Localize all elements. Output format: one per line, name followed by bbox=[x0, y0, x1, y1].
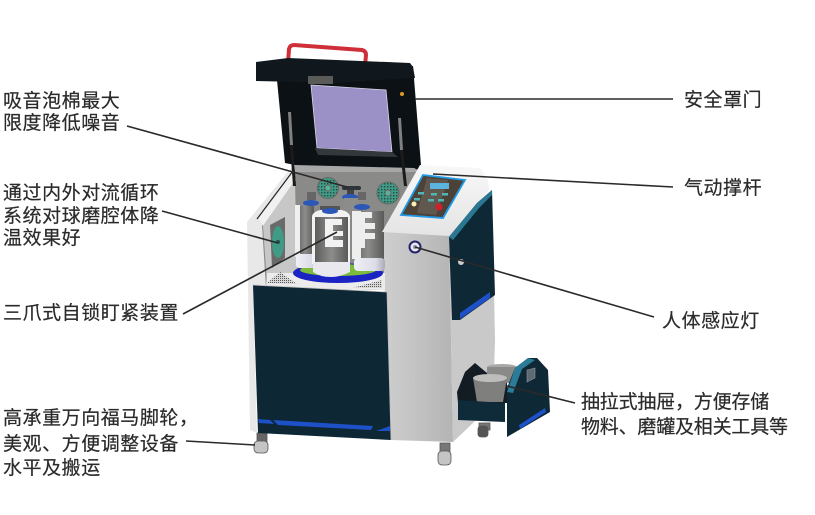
leader lines bbox=[127, 99, 673, 445]
label: drawer: 抽拉式抽屉，方便存储 bbox=[581, 391, 769, 413]
amber indicator bbox=[400, 92, 404, 96]
drawer tray bbox=[458, 400, 505, 422]
caster wheels bbox=[254, 423, 490, 465]
right jar bbox=[352, 211, 385, 271]
chamber floor with vent grilles bbox=[266, 272, 385, 290]
left wall bbox=[263, 180, 297, 283]
left jar bbox=[295, 205, 318, 268]
grey column side bbox=[449, 190, 495, 442]
left cabinet side and frame bbox=[247, 168, 300, 433]
interior chamber bbox=[257, 165, 418, 290]
lid with handle and window bbox=[256, 45, 421, 186]
machine illustration bbox=[247, 45, 550, 465]
red handle bbox=[288, 45, 366, 66]
label: cooling circulation: 温效果好 bbox=[3, 227, 81, 249]
label: casters: 水平及搬运 bbox=[3, 457, 101, 479]
gas struts bbox=[288, 112, 293, 145]
viewing window bbox=[311, 85, 392, 152]
lid hinge badge bbox=[308, 76, 333, 84]
lower front door bbox=[253, 285, 391, 440]
sloped console top bbox=[382, 165, 489, 236]
back caps and T-handle bbox=[303, 186, 370, 212]
label: clamping device: 三爪式自锁盯紧装置 bbox=[3, 302, 179, 324]
label: casters bbox=[3, 407, 199, 479]
rear cup bbox=[487, 364, 517, 383]
lid inner face bbox=[277, 66, 421, 170]
side fan plate bbox=[270, 217, 285, 268]
upper side door bbox=[449, 190, 495, 320]
back fans bbox=[318, 178, 399, 204]
label: cooling circulation bbox=[3, 182, 159, 249]
grey main column bbox=[382, 232, 453, 442]
label: drawer: 物料、磨罐及相关工具等 bbox=[581, 416, 788, 438]
label: casters: 高承重万向福马脚轮， bbox=[3, 407, 199, 429]
label: sound-absorbing foam bbox=[3, 90, 120, 134]
label: sound-absorbing foam: 限度降低噪音 bbox=[3, 112, 120, 134]
drawer back recess bbox=[457, 363, 507, 403]
jars bbox=[295, 186, 385, 277]
front cup bbox=[473, 374, 507, 402]
status lamp bbox=[410, 242, 420, 252]
pull-out drawer bbox=[457, 358, 550, 437]
label: drawer bbox=[581, 391, 788, 438]
control panel bbox=[401, 175, 465, 218]
label: sensor light: 人体感应灯 bbox=[662, 310, 760, 332]
white frame band bbox=[258, 172, 296, 226]
label: casters: 美观、方便调整设备 bbox=[3, 433, 179, 455]
label: gas strut: 气动撑杆 bbox=[684, 177, 762, 199]
label: cooling circulation: 系统对球磨腔体降 bbox=[3, 205, 159, 227]
label: cooling circulation: 通过内外对流循环 bbox=[3, 182, 159, 204]
lip under lid bbox=[295, 165, 417, 172]
rotating blue base disc bbox=[293, 263, 383, 283]
label: sound-absorbing foam: 吸音泡棉最大 bbox=[3, 90, 120, 112]
middle jar bbox=[312, 206, 350, 277]
lid top band bbox=[256, 58, 415, 83]
label: safety door: 安全罩门 bbox=[684, 89, 762, 111]
drawer front bbox=[507, 358, 550, 437]
